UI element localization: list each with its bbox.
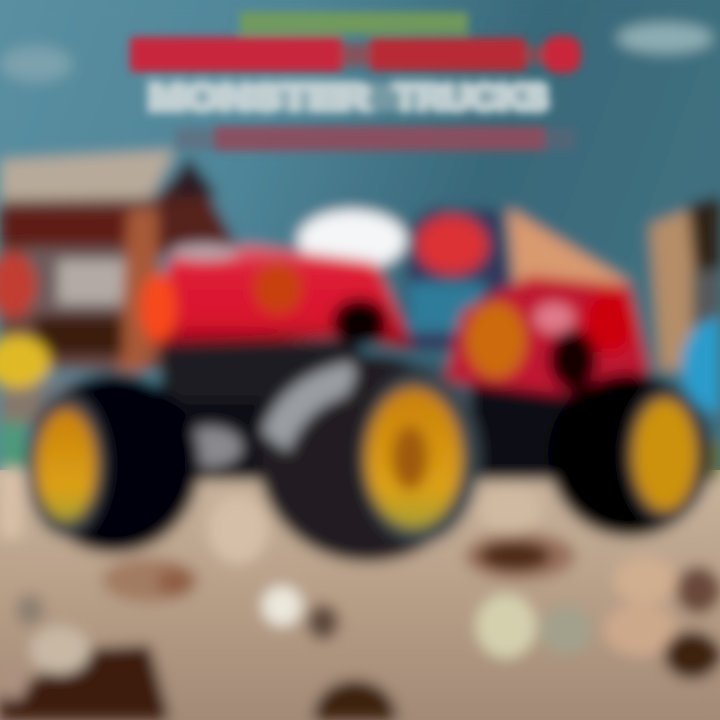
- barn dark gable: [155, 158, 238, 255]
- truck: bright red panel: [584, 290, 636, 354]
- truck: cab frame: [400, 208, 512, 350]
- barn roof: [0, 150, 175, 200]
- wheel: right front: [548, 373, 712, 537]
- truck: dark wheel arch: [332, 298, 388, 346]
- sky cloud: top right: [617, 23, 713, 53]
- barn lower dark beam: [35, 316, 123, 356]
- rock: bottom left dark: [0, 645, 170, 720]
- truck: undercarriage: [170, 345, 650, 480]
- ground band: [0, 470, 720, 720]
- truck: grey axle: [178, 427, 242, 467]
- barn red sign: [0, 253, 36, 317]
- ground rocks and debris: [0, 486, 720, 720]
- background: dirt ground: [0, 470, 720, 720]
- rock: white pebble: [262, 586, 302, 626]
- truck: grey hood highlight: [171, 244, 239, 260]
- left props: yellow and green: [0, 336, 100, 538]
- building: left barn: [0, 150, 238, 372]
- truck: pink highlight: [534, 303, 574, 333]
- title: white line: MONSTER: [148, 77, 370, 119]
- truck: dark arch front: [549, 330, 597, 390]
- truck: front body red: [446, 276, 650, 394]
- wheel: rear left: [26, 373, 200, 553]
- monster truck: [26, 208, 712, 562]
- title: white line: [148, 77, 549, 119]
- truck: cab blue window: [408, 282, 488, 332]
- truck: tan rear wedge: [508, 208, 632, 292]
- rock: left pale stones: [16, 594, 44, 626]
- rock: dirt under rear wheel: [102, 558, 198, 602]
- background: teal sky: [0, 0, 720, 480]
- rock: pale pile right of centre: [476, 594, 536, 658]
- truck: orange flame front: [466, 302, 526, 378]
- truck: orange flame rear: [140, 274, 176, 342]
- rock: bottom center dark: [312, 680, 398, 720]
- blue object: [681, 318, 720, 412]
- title: maroon subtitle line: [175, 126, 575, 151]
- truck: rear body red: [150, 245, 414, 350]
- rock: stack right: [604, 556, 720, 679]
- sky band: [0, 0, 720, 490]
- rock: light patches between wheels: [208, 496, 268, 564]
- title: green top line: [240, 12, 468, 34]
- truck: cab red sign: [416, 216, 488, 274]
- title block: [130, 12, 581, 151]
- barn grey wall: [25, 250, 130, 312]
- barn post: [118, 210, 158, 372]
- sky cloud: top left: [0, 46, 72, 82]
- building: right structure: [650, 195, 720, 480]
- rock: dirt under front wheel: [465, 532, 575, 580]
- wheel: center front: [258, 354, 480, 562]
- barn red band: [0, 208, 130, 246]
- barn body: [0, 195, 160, 370]
- title: red line: [130, 36, 581, 73]
- title: white line: TRUCKS: [394, 77, 549, 119]
- sky cloud: behind truck: [298, 210, 406, 270]
- barn window: [58, 260, 128, 304]
